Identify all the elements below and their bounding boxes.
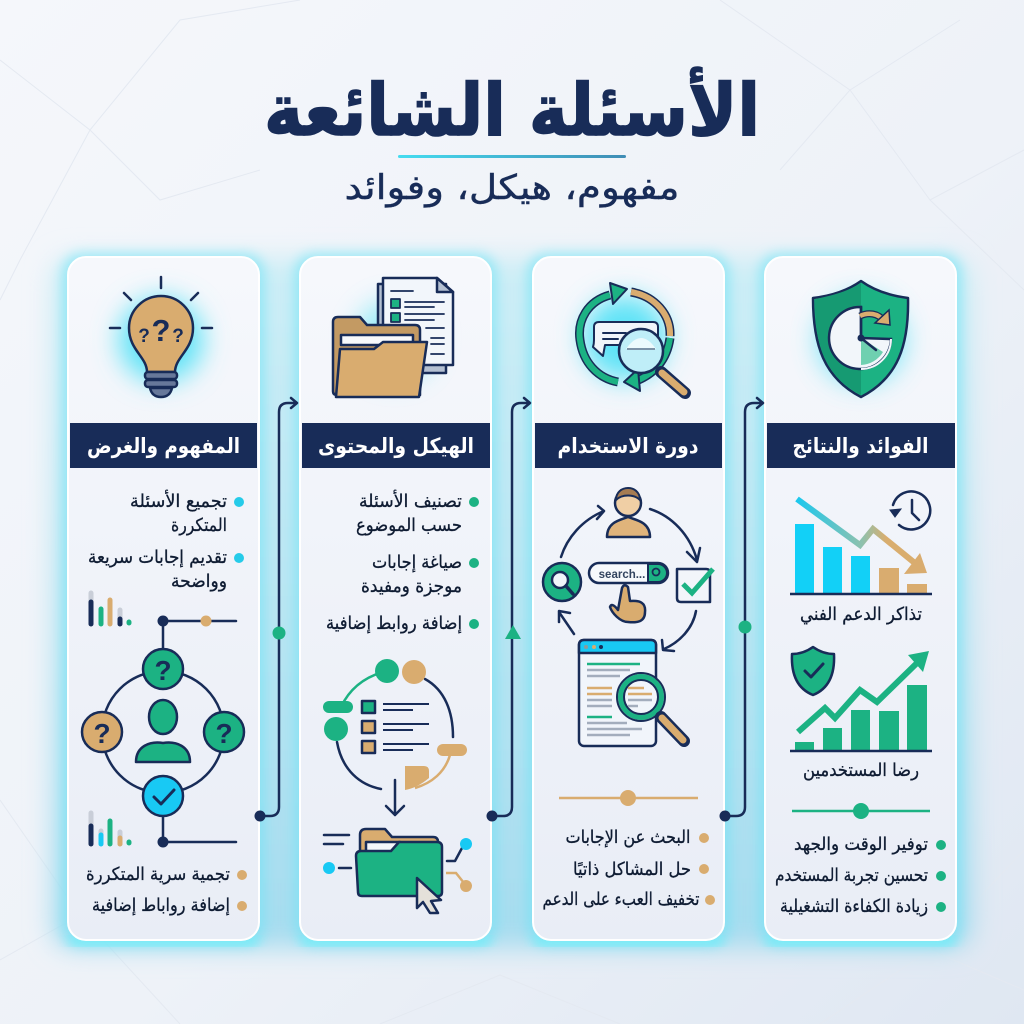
- chart: support tickets down: [790, 491, 932, 594]
- arrow: usage to benefits: [720, 398, 763, 822]
- network diagram: ?: [215, 718, 233, 749]
- title: الأسئلة الشائعة: [264, 66, 760, 152]
- subtitle: مفهوم، هيكل، وفوائد: [344, 168, 680, 208]
- arrow: structure to usage: [486, 398, 530, 822]
- heading bar: [767, 423, 955, 468]
- heading bar: [70, 423, 257, 468]
- bullet list: حل المشاكل ذاتيًا: [573, 859, 691, 880]
- chart: satisfaction up: [790, 647, 932, 751]
- bullet list: المتكررة: [171, 515, 227, 536]
- bullet list: تخفيف العبء على الدعم: [542, 889, 700, 910]
- heading bar: دورة الاستخدام: [558, 434, 699, 458]
- bullet list: حسب الموضوع: [356, 515, 462, 536]
- bullet list: [88, 490, 244, 592]
- panel: benefits and results: [765, 257, 956, 940]
- bullet list: تصنيف الأسئلة: [359, 490, 462, 512]
- icon: green folder with cursor: [323, 829, 472, 913]
- heading bar: [535, 423, 722, 468]
- bullet list bottom: [86, 864, 247, 916]
- bullet list: توفير الوقت والجهد: [794, 834, 928, 855]
- divider: [559, 790, 698, 806]
- bullet list: [542, 827, 715, 910]
- bullet list: تحسين تجربة المستخدم: [775, 865, 928, 886]
- network diagram: ?: [154, 655, 172, 686]
- icon: folder and documents: [333, 278, 453, 397]
- bullet list: تجميع الأسئلة: [130, 490, 227, 512]
- search results browser: [579, 640, 684, 746]
- icon: lightbulb: ?: [138, 326, 150, 347]
- bullet list: البحث عن الإجابات: [566, 827, 690, 848]
- process cycle: [323, 659, 467, 815]
- chart label: تذاكر الدعم الفني: [800, 604, 922, 625]
- bullet list bottom: إضافة رواباط إضافية: [92, 895, 230, 916]
- arrow: concept to structure: [254, 398, 297, 822]
- chart label: رضا المستخدمين: [803, 760, 919, 781]
- bullet list: إضافة روابط إضافية: [326, 613, 462, 634]
- panel: structure and content: [300, 257, 491, 940]
- title rule: [398, 155, 626, 158]
- bullet list: [326, 490, 479, 634]
- user search cycle: [543, 488, 713, 651]
- bullet list: وواضحة: [171, 571, 227, 592]
- divider: [792, 803, 930, 819]
- heading bar: الهيكل والمحتوى: [318, 434, 474, 458]
- icon: lightbulb: ?: [152, 313, 170, 348]
- bullet list: زيادة الكفاءة التشغيلية: [780, 896, 928, 917]
- card glow: [52, 253, 972, 948]
- user search cycle: search...: [599, 569, 645, 581]
- icon: lightbulb: [110, 277, 212, 397]
- bullet list: تقديم إجابات سريعة: [88, 547, 227, 568]
- bullet list bottom: تجمية سرية المتكررة: [86, 864, 230, 885]
- icon: cycle and magnifier: [580, 283, 685, 393]
- bullet list: صياغة إجابات: [372, 552, 462, 573]
- bullet list: موجزة ومفيدة: [361, 576, 462, 597]
- heading bar: المفهوم والغرض: [87, 434, 240, 458]
- network diagram: ?: [93, 718, 111, 749]
- icon: shield with clock: [813, 281, 908, 397]
- panel: concept and purpose: [68, 257, 259, 940]
- panel: usage cycle: [533, 257, 724, 940]
- bullet list: [775, 834, 946, 917]
- icon: lightbulb: ?: [172, 326, 184, 347]
- mini bars bottom: [91, 813, 129, 844]
- network diagram: [82, 616, 244, 848]
- heading bar: الفوائد والنتائج: [792, 434, 928, 458]
- heading bar: [302, 423, 490, 468]
- mini bars top: [91, 593, 129, 624]
